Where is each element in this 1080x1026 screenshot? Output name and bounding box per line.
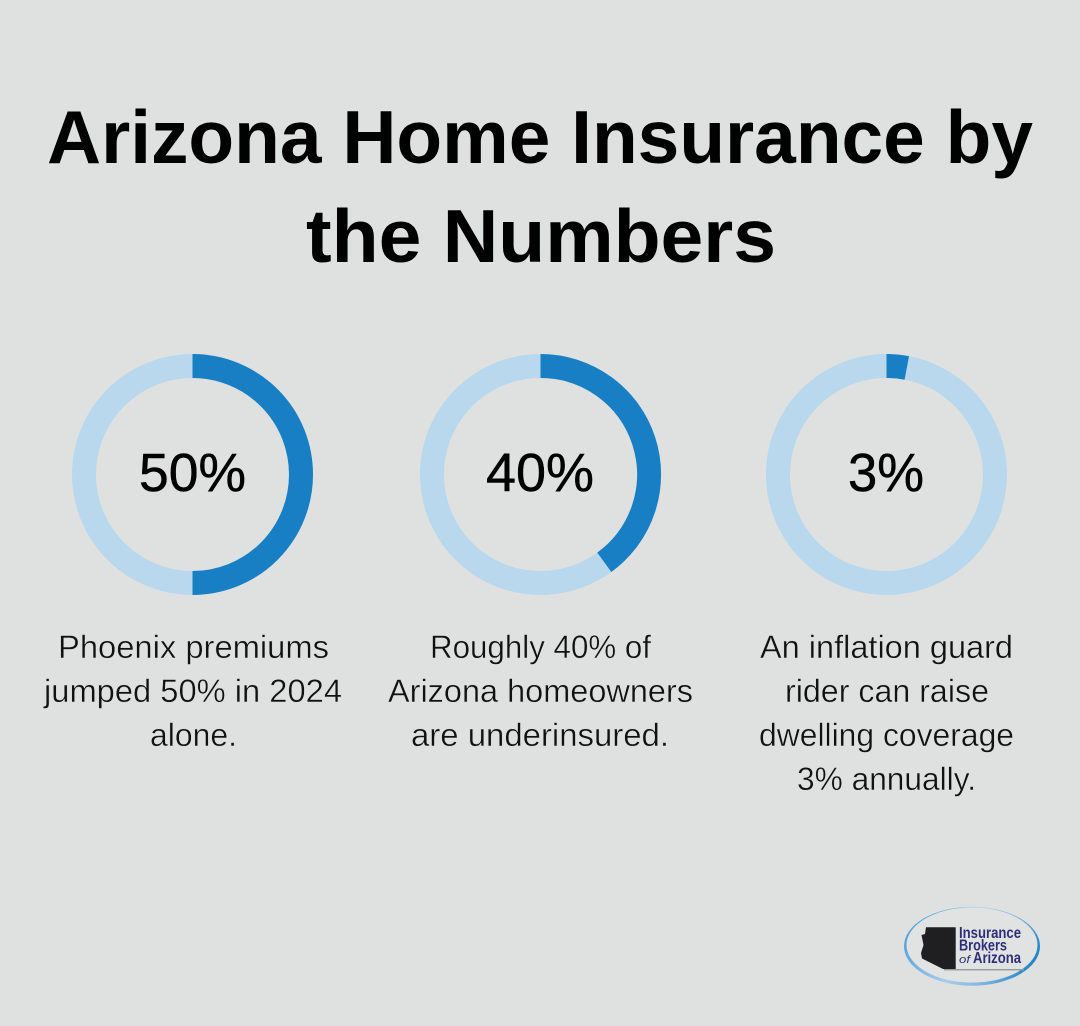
logo text: Insurance xyxy=(959,925,1021,942)
description: Phoenix premiums: Phoenix premiums xyxy=(58,629,329,665)
logo text: of xyxy=(959,954,971,966)
logo underline xyxy=(944,969,1024,970)
donut chart: 40% xyxy=(432,366,649,583)
description: inflation guard rider: 3% annually. xyxy=(797,761,976,797)
logo: Insurance Brokers of Arizona xyxy=(904,907,1040,986)
description: Phoenix premiums: jumped 50% in 2024 xyxy=(43,673,342,709)
title: Arizona Home Insurance by xyxy=(47,95,1033,179)
title xyxy=(47,95,1033,278)
logo text: Arizona xyxy=(973,950,1021,967)
logo text xyxy=(959,925,1021,967)
description: underinsured homeowners: Arizona homeowners xyxy=(388,673,693,709)
description: inflation guard rider: dwelling coverage xyxy=(759,717,1014,753)
logo ring xyxy=(904,907,1040,986)
description: underinsured homeowners: Roughly 40% of xyxy=(430,629,651,665)
panel: 3% stat xyxy=(759,366,1014,797)
value: 40%: 40% xyxy=(486,443,594,503)
description: inflation guard rider: An inflation guard xyxy=(760,629,1013,665)
description: Phoenix premiums xyxy=(43,629,342,753)
icon: Arizona state shape xyxy=(921,927,956,969)
value: 3%: 3% xyxy=(848,443,924,503)
description: Phoenix premiums: alone. xyxy=(150,717,237,753)
logo text: Brokers xyxy=(959,938,1007,954)
description: underinsured homeowners: are underinsured. xyxy=(411,717,669,753)
value: 50%: 50% xyxy=(139,443,246,503)
donut chart: 3% xyxy=(778,366,995,583)
title: the Numbers xyxy=(306,194,776,278)
panel: 40% stat xyxy=(388,366,693,753)
description: inflation guard rider: rider can raise xyxy=(785,673,989,709)
panel: 50% stat xyxy=(43,366,342,753)
description: inflation guard rider xyxy=(759,629,1014,797)
donut chart: 50% xyxy=(84,366,301,583)
description: underinsured homeowners xyxy=(388,629,693,753)
